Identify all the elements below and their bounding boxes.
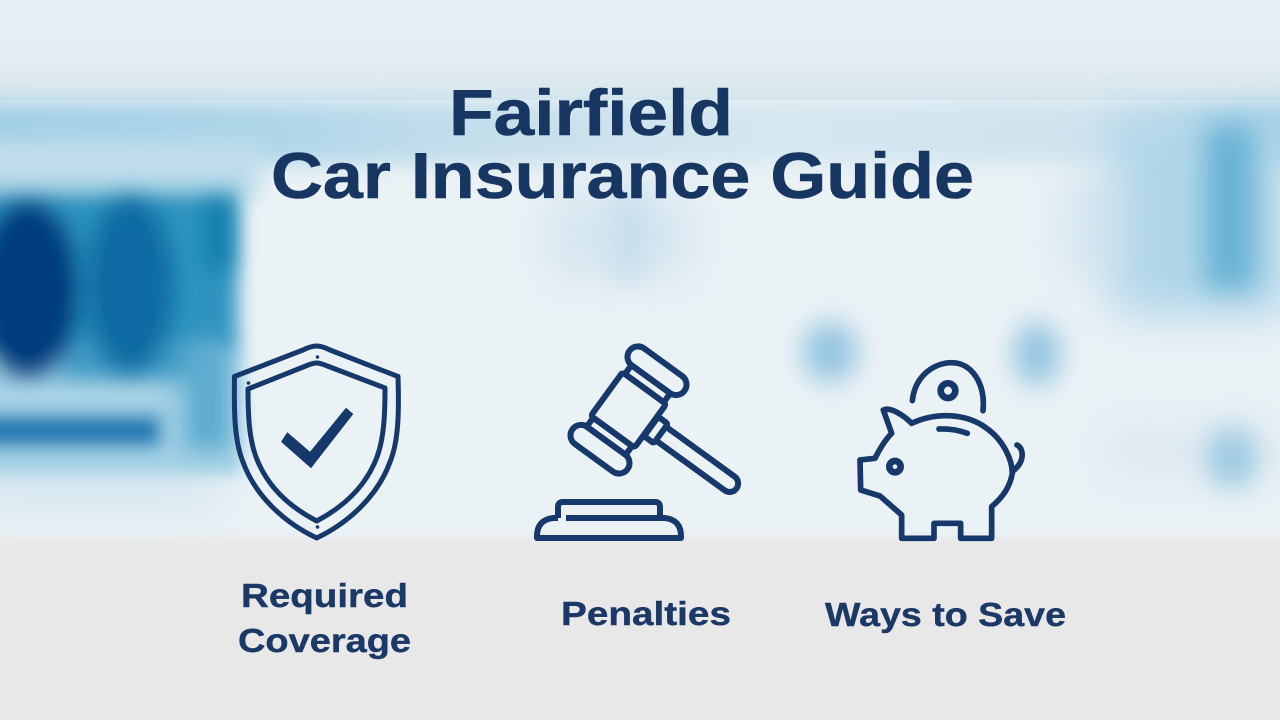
icon: piggy bank with coin (860, 363, 1022, 538)
dark blurred shapes at left (0, 180, 242, 475)
label: Required Coverage: Required (241, 577, 408, 614)
gavel head and handle (566, 342, 771, 536)
gavel sound block (537, 502, 681, 538)
title (271, 76, 974, 212)
label: Penalties: Penalties (561, 595, 731, 632)
bottom grey band (0, 530, 1280, 720)
label: Required Coverage: Coverage (238, 622, 411, 659)
icon: shield with check mark (234, 346, 398, 538)
title: Car Insurance Guide (271, 139, 974, 212)
label: Ways to Save: Ways to Save (825, 596, 1066, 633)
title: Fairfield (449, 76, 733, 149)
label: Required Coverage (238, 577, 411, 659)
icon: gavel (537, 342, 771, 538)
